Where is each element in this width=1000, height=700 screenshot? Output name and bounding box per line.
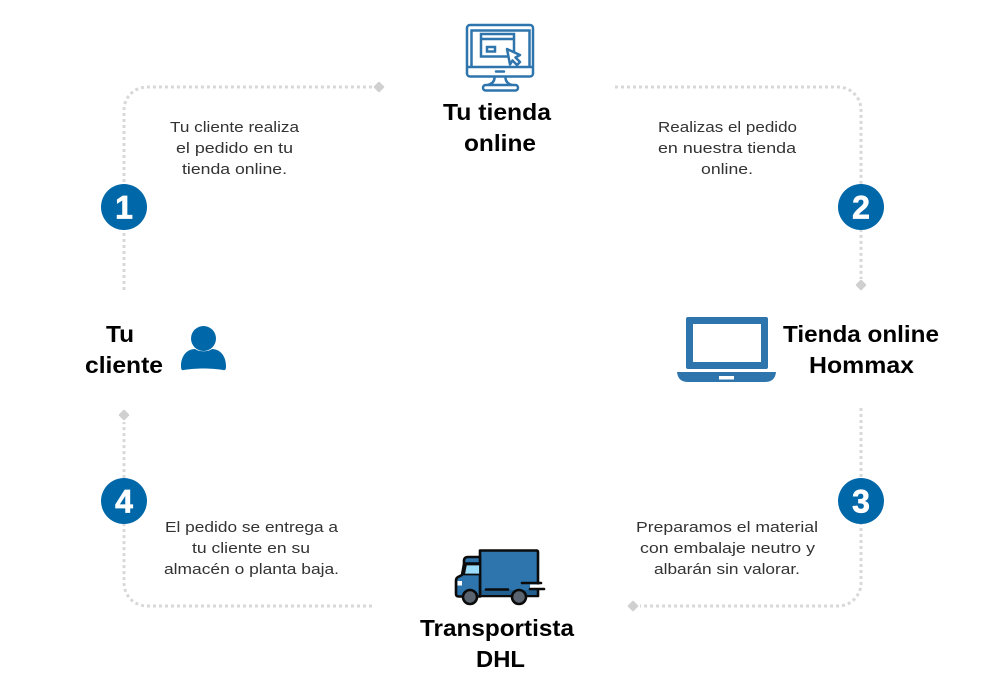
badge: step 4 [101, 478, 147, 524]
heading: Tu tienda online: Tu tienda [443, 99, 551, 125]
text: step 4 description: El pedido se entrega a [165, 519, 339, 536]
text: step 3 description: con embalaje neutro y [640, 540, 816, 557]
badge: step 4: 4 [115, 484, 133, 520]
text: step 4 description [164, 519, 339, 578]
heading: Tienda online Hommax [783, 321, 939, 378]
text: step 2 description [658, 119, 797, 178]
text: step 2 description: Realizas el pedido [658, 119, 797, 136]
heading: Tu cliente: cliente [85, 352, 163, 378]
icon: desktop monitor with shop window [467, 25, 533, 90]
heading: Tu cliente [85, 321, 163, 378]
text: step 1 description [170, 119, 300, 178]
heading: Tu tienda online [443, 99, 551, 156]
badge: step 2 [838, 184, 884, 230]
text: step 4 description: tu cliente en su [192, 540, 310, 557]
badge: step 1: 1 [115, 190, 133, 226]
text: step 2 description: en nuestra tienda [658, 140, 797, 157]
text: step 1 description: tienda online. [182, 161, 287, 178]
heading: Tu cliente: Tu [106, 321, 134, 347]
badge: step 1 [101, 184, 147, 230]
arrow: client to online store [124, 81, 385, 290]
text: step 4 description: almacén o planta baja. [164, 561, 339, 578]
text: step 1 description: Tu cliente realiza [170, 119, 300, 136]
icon: laptop [677, 317, 776, 382]
text: step 3 description: Preparamos el material [636, 519, 818, 536]
badge: step 3: 3 [852, 484, 870, 520]
heading: Transportista DHL: Transportista [420, 615, 574, 641]
icon: delivery truck [456, 550, 544, 604]
badge: step 2: 2 [852, 190, 870, 226]
arrow: carrier to client [118, 409, 372, 606]
text: step 1 description: el pedido en tu [176, 140, 293, 157]
heading: Tienda online Hommax: Tienda online [783, 321, 939, 347]
heading: Transportista DHL [420, 615, 574, 672]
text: step 3 description: albarán sin valorar. [654, 561, 800, 578]
heading: Transportista DHL: DHL [476, 646, 525, 672]
heading: Tu tienda online: online [464, 130, 536, 156]
text: step 3 description [636, 519, 818, 578]
text: step 2 description: online. [701, 161, 753, 178]
heading: Tienda online Hommax: Hommax [809, 352, 914, 378]
arrow: Hommax to carrier [627, 408, 861, 612]
arrow: online store to Hommax [615, 87, 867, 291]
icon: person [181, 326, 226, 370]
badge: step 3 [838, 478, 884, 524]
